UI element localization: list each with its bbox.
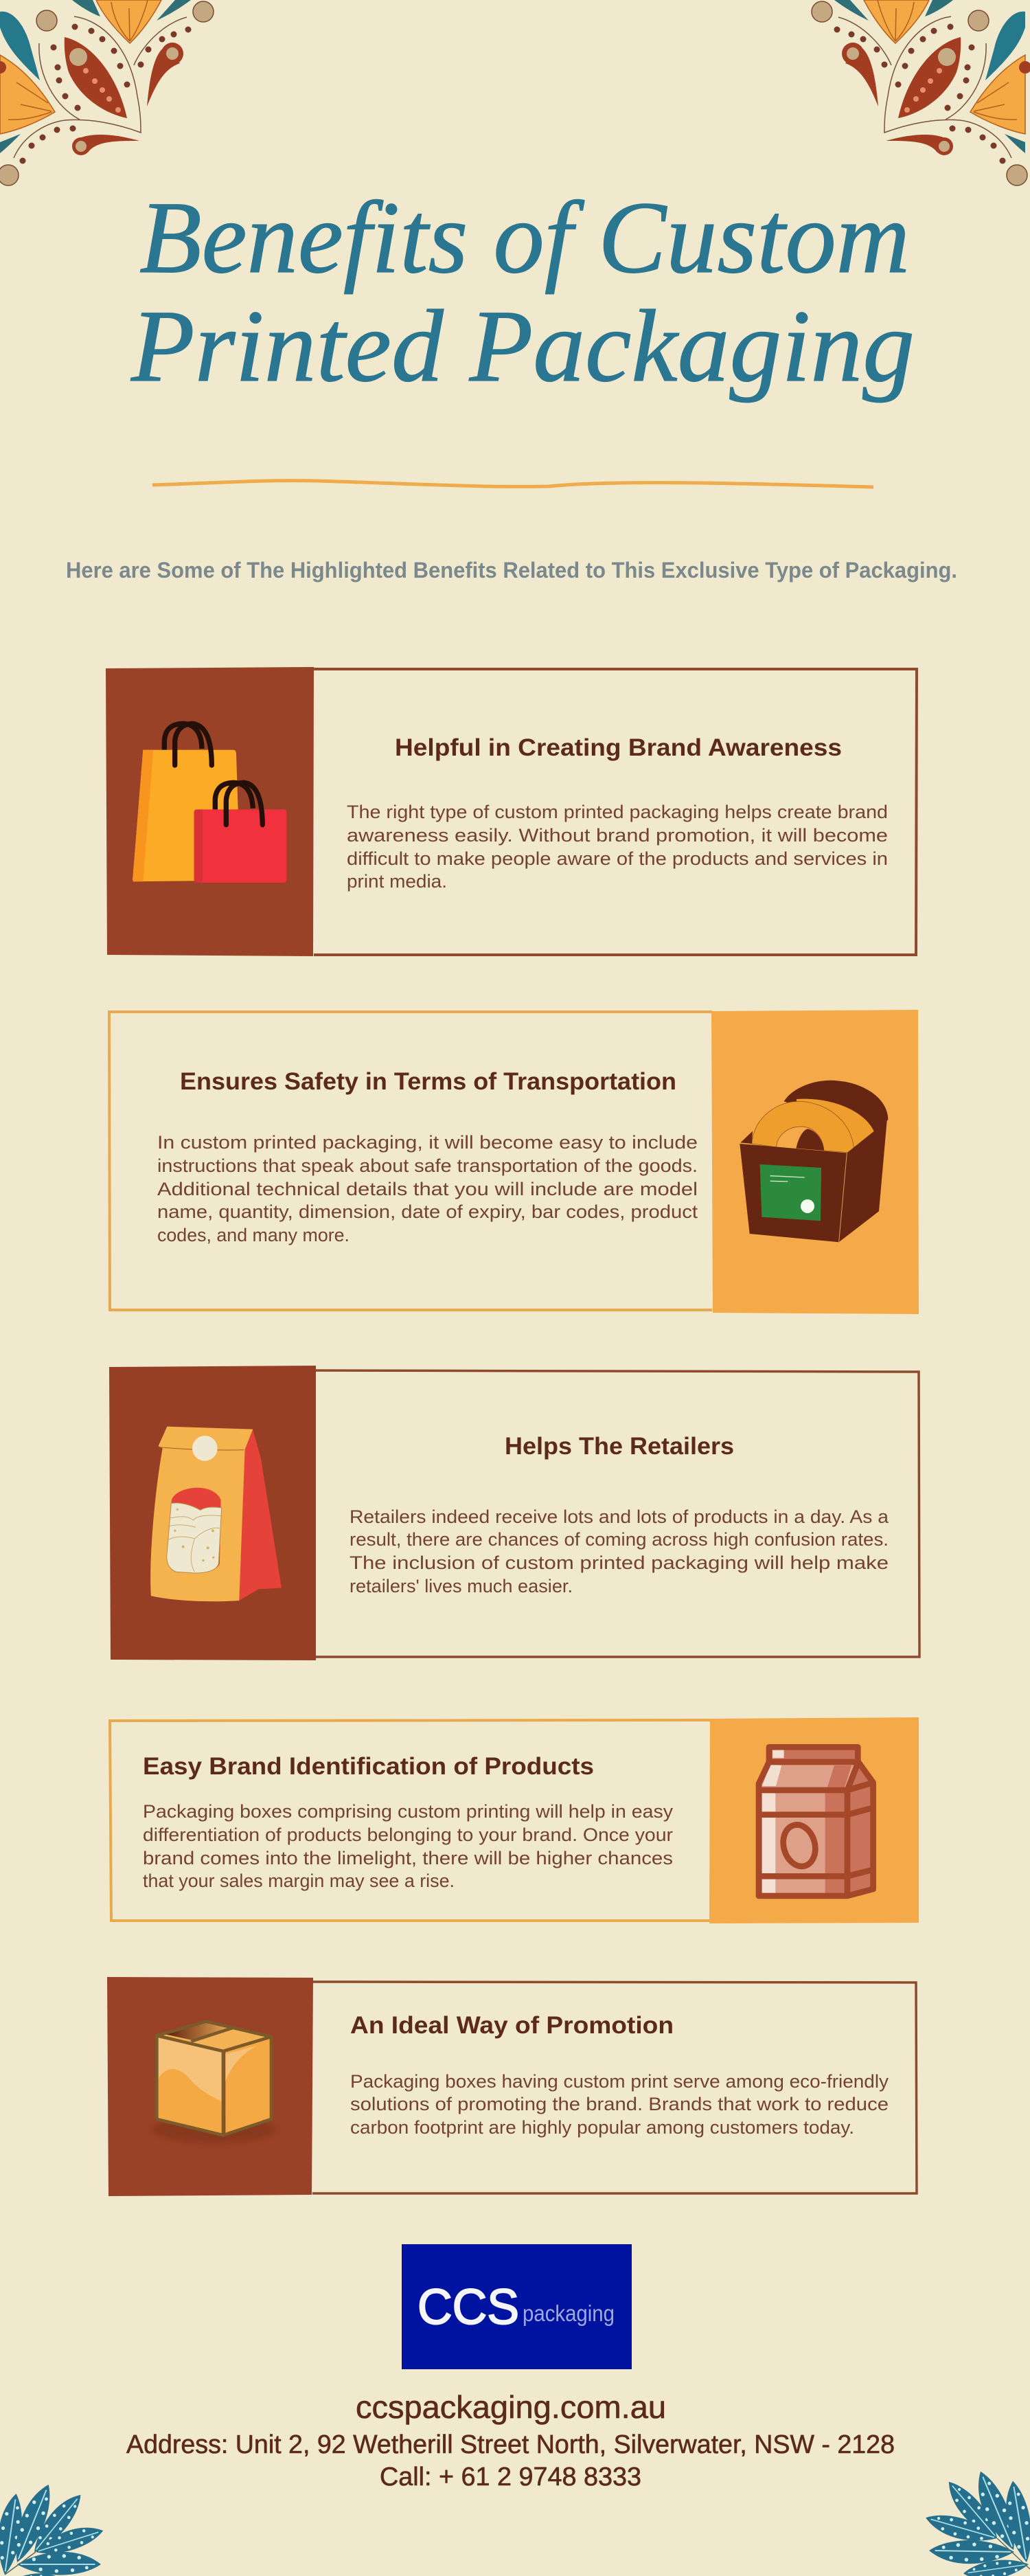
body text [350, 2071, 889, 2138]
body text [157, 1132, 698, 1245]
panel: brand awareness [106, 667, 917, 956]
heading: Ensures Safety in Terms of Transportation [180, 1068, 676, 1095]
title [130, 181, 915, 403]
body text: difficult to make people aware of the products and services in [347, 848, 888, 869]
contact details: Address: Unit 2, 92 Wetherill Street North, Silverwater, NSW - 2128 [126, 2430, 895, 2459]
body text: solutions of promoting the brand. Brands that work to reduce [350, 2094, 889, 2114]
body text: print media. [347, 871, 447, 892]
body text: The right type of custom printed packaging helps create brand [347, 802, 888, 822]
body text: name, quantity, dimension, date of expiry, bar codes, product [157, 1201, 698, 1222]
subtitle: Here are Some of The Highlighted Benefits Related to This Exclusive Type of Packaging. [66, 558, 957, 583]
icon: bagel box [740, 1081, 888, 1242]
body text: Packaging boxes having custom print serve among eco-friendly [350, 2071, 889, 2092]
panel: brand identification [110, 1717, 919, 1923]
body text: The inclusion of custom printed packaging will help make [350, 1552, 889, 1573]
body text: carbon footprint are highly popular among customers today. [350, 2117, 854, 2138]
panel: ideal way of promotion [107, 1977, 917, 2196]
body text: brand comes into the limelight, there will be higher chances [143, 1848, 673, 1868]
logo: CCS packaging [402, 2244, 632, 2369]
icon: bakery bag [150, 1427, 282, 1601]
body text: awareness easily. Without brand promotion, it will become [347, 825, 888, 846]
body text [347, 802, 888, 892]
ornament: top right corner [812, 0, 1030, 185]
body text: that your sales margin may see a rise. [143, 1871, 455, 1891]
contact details: Call: + 61 2 9748 8333 [380, 2463, 641, 2492]
icon: shopping bags [133, 723, 286, 883]
contact details [126, 2389, 895, 2492]
leaves: bottom left [0, 2480, 106, 2576]
body text: Additional technical details that you will include are model [157, 1179, 698, 1199]
ornament: top left corner [0, 0, 214, 185]
body text [350, 1506, 889, 1596]
body text: codes, and many more. [157, 1225, 350, 1245]
body text: differentiation of products belonging to your brand. Once your [143, 1824, 673, 1845]
panel: helps the retailers [109, 1366, 919, 1660]
heading: Helps The Retailers [505, 1433, 734, 1460]
body text [143, 1801, 674, 1891]
heading: Easy Brand Identification of Products [143, 1753, 594, 1780]
panel: transportation safety [109, 1010, 919, 1314]
body text: instructions that speak about safe transportation of the goods. [157, 1155, 698, 1176]
body text: Packaging boxes comprising custom printing will help in easy [143, 1801, 674, 1822]
contact details: ccspackaging.com.au [356, 2389, 666, 2425]
title: Printed Packaging [130, 289, 915, 403]
icon: milk carton [759, 1747, 873, 1896]
title: Benefits of Custom [139, 181, 910, 295]
logo: CCS packaging: CCS [417, 2280, 519, 2335]
body text: retailers' lives much easier. [350, 1576, 573, 1596]
icon: cardboard box [152, 2021, 276, 2143]
logo: CCS packaging: packaging [523, 2301, 615, 2326]
heading: Helpful in Creating Brand Awareness [395, 734, 842, 761]
heading: An Ideal Way of Promotion [350, 2012, 674, 2039]
body text: result, there are chances of coming across high confusion rates. [350, 1529, 889, 1550]
body text: In custom printed packaging, it will become easy to include [157, 1132, 698, 1153]
leaves: bottom right [923, 2467, 1030, 2576]
body text: Retailers indeed receive lots and lots of products in a day. As a [350, 1506, 889, 1527]
